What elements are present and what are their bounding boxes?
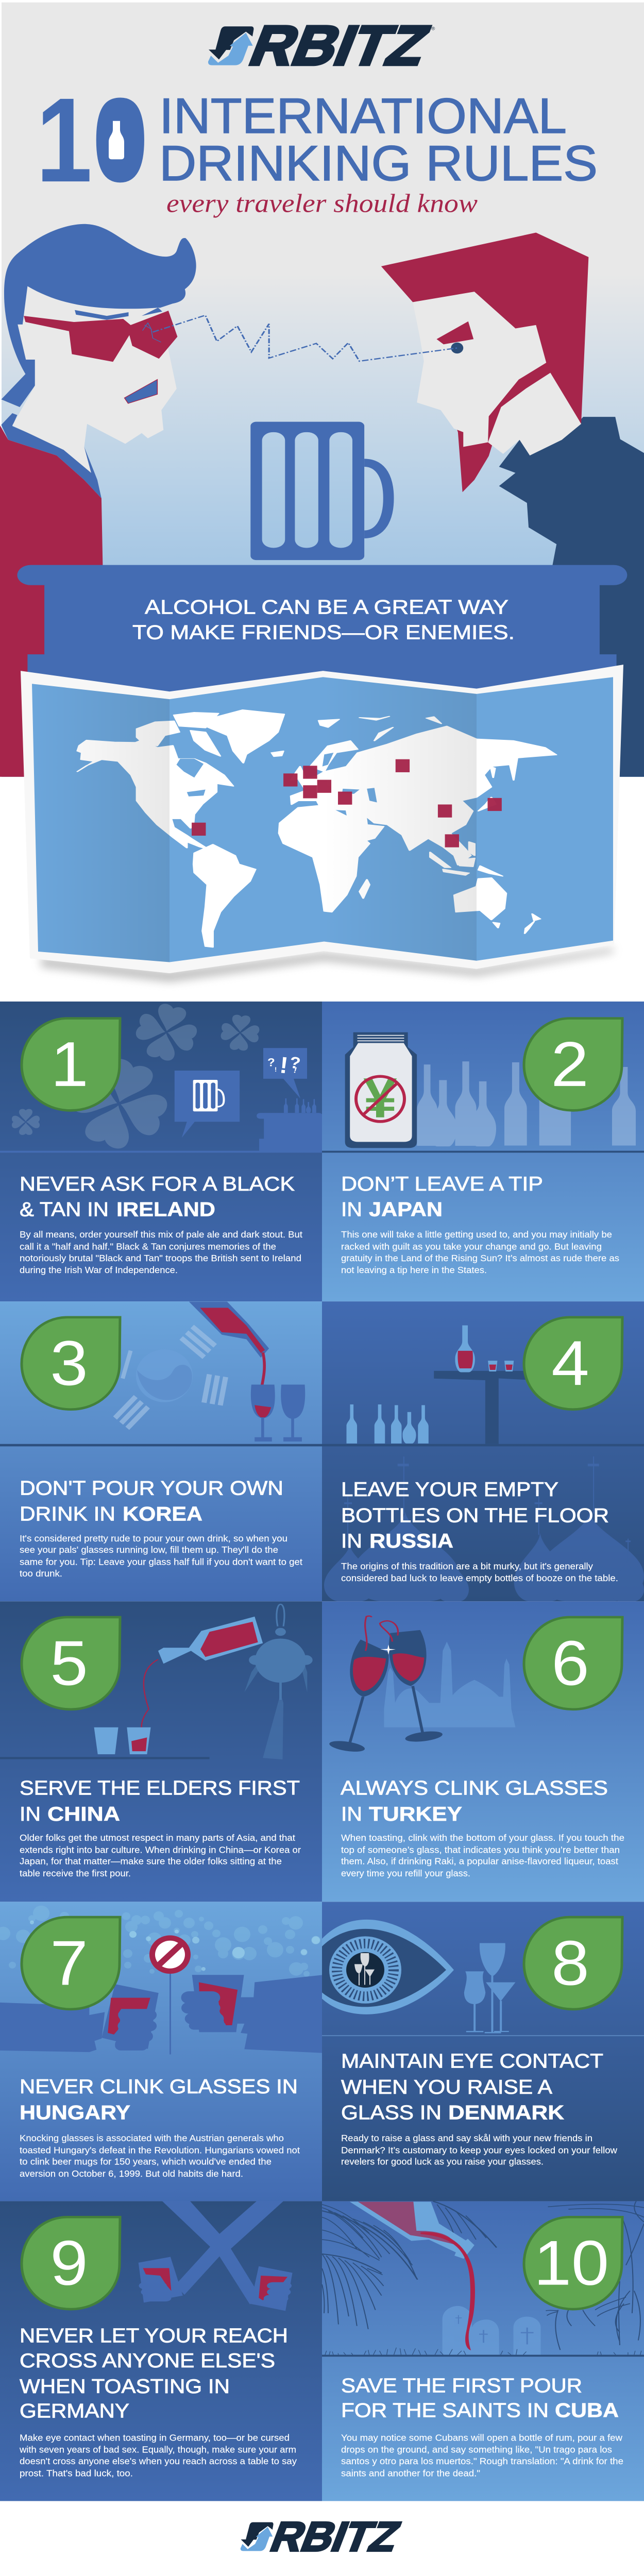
fold shading left <box>32 684 170 962</box>
subtitle: every traveler should know <box>166 190 478 218</box>
heading: SAVE THE FIRST POUR <box>341 2374 582 2397</box>
left man mouth <box>125 380 157 403</box>
panel background <box>0 1601 322 1902</box>
number badge 3: 3 <box>50 1328 88 1399</box>
left arm and glass <box>0 1984 159 2052</box>
speech bubble with confused marks: ? <box>289 1053 302 1072</box>
heading <box>341 2049 603 2124</box>
map sea <box>32 677 613 962</box>
heading: FOR THE SAINTS IN <box>341 2399 549 2421</box>
logo wordmark: RBITZ <box>265 2513 406 2560</box>
Orbitz logo <box>208 14 438 77</box>
heading: DON’T LEAVE A TIP <box>341 1172 543 1195</box>
logo icon: O arrows <box>241 2522 274 2551</box>
heading: GERMANY <box>20 2399 129 2422</box>
heading: GLASS IN <box>341 2101 442 2124</box>
right glass and fist <box>250 2266 293 2311</box>
panel background <box>0 1002 322 1301</box>
panel 1: Ireland <box>0 998 323 1301</box>
floor line <box>0 1151 322 1153</box>
heading <box>20 2324 288 2422</box>
background bottles <box>417 1061 636 1146</box>
number badge 5: 5 <box>50 1628 88 1699</box>
panel 2: Japan <box>322 1002 644 1301</box>
speech bubble with mug <box>175 1071 240 1138</box>
heading: CROSS ANYONE ELSE'S <box>20 2349 275 2371</box>
panel 9: Germany <box>0 2201 322 2501</box>
footer Orbitz logo <box>241 2513 406 2560</box>
number badge 10: 10 <box>534 2228 609 2299</box>
heading <box>20 1776 300 1825</box>
heading: KOREA <box>123 1502 202 1525</box>
shot glasses <box>0 1727 210 1759</box>
Chinese knot <box>244 1604 313 1759</box>
number badge 1 <box>22 1019 120 1110</box>
number badge 3 <box>22 1317 120 1410</box>
heading: HUNGARY <box>20 2101 130 2124</box>
heading: NEVER CLINK GLASSES IN <box>20 2075 298 2098</box>
shelf line <box>322 1151 644 1153</box>
heading: DRINK IN <box>20 1502 115 1525</box>
right man eye <box>451 343 463 353</box>
body text: not leaving a tip here in the States. <box>341 1265 487 1275</box>
heading: BOTTLES ON THE FLOOR <box>341 1504 609 1527</box>
tombstones <box>443 2306 541 2355</box>
body text: toasted Hungary's defeat in the Revolution. Hungarians vowed not <box>20 2145 300 2155</box>
speech bubble with confused marks: ! <box>275 1066 277 1073</box>
divider line <box>322 2035 644 2036</box>
heading: NEVER LET YOUR REACH <box>20 2324 288 2347</box>
body text: call it a "half and half." Black & Tan conjures memories of the <box>20 1241 276 1251</box>
grass and ground <box>322 2348 644 2357</box>
body text: By all means, order yourself this mix of pale ale and dark stout. But <box>20 1229 302 1240</box>
table with bottle and shots <box>434 1325 528 1444</box>
body text: drops on the ground, and say something like, "Un trago para los <box>341 2444 612 2454</box>
floor bottles <box>346 1404 429 1444</box>
map shadow <box>41 948 613 982</box>
number badge 5 <box>22 1617 120 1709</box>
crossed arms <box>162 2201 283 2304</box>
body text: Japan, for that matter—make sure the older folks sitting at the <box>20 1856 282 1867</box>
body text: considered bad luck to leave empty bottles of booze on the table. <box>341 1573 618 1583</box>
body text: Older folks get the utmost respect in many parts of Asia, and that <box>20 1833 295 1843</box>
body text: extends right into bar culture. When drinking in China—or Korea or <box>20 1844 301 1855</box>
number badge 2: 2 <box>551 1029 589 1100</box>
panel 10: Cuba <box>322 2201 644 2501</box>
body text <box>20 1533 302 1579</box>
heading: IRELAND <box>116 1198 215 1221</box>
body text: table receive the first pour. <box>20 1868 131 1878</box>
heading: IN <box>341 1802 362 1825</box>
right man hair <box>381 232 588 492</box>
body text: gratuity in the Land of the Rising Sun? It’s almost as rude there as <box>341 1252 619 1263</box>
map paper frame <box>21 665 623 973</box>
body text: Make eye contact when toasting in Germany, too—or be cursed <box>20 2432 290 2443</box>
mosque silhouette <box>323 1641 515 1727</box>
heading: IN <box>341 1198 362 1221</box>
body text: revelers for good luck as you raise your glasses. <box>341 2156 544 2167</box>
title <box>36 73 598 218</box>
bar headline: ALCOHOL CAN BE A GREAT WAY <box>145 596 509 618</box>
location markers <box>192 759 502 848</box>
logo wordmark: RBITZ <box>242 14 438 77</box>
panel background <box>322 1301 644 1601</box>
number badge 4 <box>524 1317 622 1410</box>
left man shoulder <box>0 426 107 777</box>
jar <box>345 1032 417 1148</box>
heading <box>341 2374 619 2421</box>
heading: DON'T POUR YOUR OWN <box>20 1477 283 1499</box>
palm fronds <box>322 2201 644 2350</box>
speech bubble with confused marks: ? <box>267 1056 275 1069</box>
heading: TURKEY <box>369 1802 462 1825</box>
registered mark: ® <box>431 26 435 32</box>
left man collar <box>1 413 101 498</box>
bar counter <box>17 565 627 716</box>
body text: them. Also, if drinking Raki, a popular anise-flavored liqueur, toast <box>341 1856 618 1867</box>
number badge 2 <box>524 1019 622 1110</box>
speech bubble with confused marks: ! <box>293 1065 298 1075</box>
body text: santos y otro para los muertos." Rough translation: "A drink for the <box>341 2456 623 2466</box>
body text <box>341 1561 618 1583</box>
right man face <box>413 292 546 447</box>
body text <box>20 2133 300 2179</box>
right man neck <box>488 373 581 455</box>
body text: racked with guilt as you take your change and go. But leaving <box>341 1241 602 1251</box>
body text: every time you refill your glass. <box>341 1868 470 1878</box>
panel background <box>322 1902 644 2201</box>
heading: JAPAN <box>369 1198 443 1221</box>
heading: RUSSIA <box>369 1529 453 1552</box>
body text: This one will take a little getting used to, and you may initially be <box>341 1229 612 1240</box>
left man hair <box>1 224 196 407</box>
body text: same for you. Tip: Leave your glass half full if you don't want to get <box>20 1556 302 1567</box>
speech bubble with confused marks <box>263 1048 307 1098</box>
left man face <box>12 286 177 473</box>
body text <box>341 1229 619 1275</box>
Korean flag motif <box>113 1325 228 1430</box>
body text: aversion on October 6, 1999. But old habits die hard. <box>20 2168 243 2179</box>
body text: Denmark? It’s customary to keep your eyes locked on your fellow <box>341 2145 618 2155</box>
hero background <box>2 3 644 777</box>
heading: IN <box>20 1802 41 1825</box>
beer mug <box>250 422 388 560</box>
number badge 4: 4 <box>551 1328 589 1399</box>
floor line <box>0 1444 322 1446</box>
onion domes <box>324 1456 644 1601</box>
bar silhouette <box>257 1098 323 1151</box>
panel background <box>322 1601 644 1902</box>
body text: notoriously brutal "Black and Tan" troops the British sent to Ireland <box>20 1252 301 1263</box>
right man brow <box>436 321 473 344</box>
panel background <box>0 2201 322 2501</box>
body text: The origins of this tradition are a bit murky, but it's generally <box>341 1561 594 1571</box>
number badge 9: 9 <box>50 2228 88 2299</box>
heading: WHEN TOASTING IN <box>20 2375 230 2398</box>
no-yen sign: ¥ <box>363 1066 397 1130</box>
panel 8: Denmark <box>322 1902 644 2201</box>
dashed gaze line <box>153 315 457 361</box>
body text: to clink beer mugs for 150 years, which would've ended the <box>20 2156 272 2167</box>
title line 1: INTERNATIONAL <box>159 88 567 144</box>
panel 4: Russia <box>322 1301 644 1601</box>
right arm and glass <box>181 1975 322 2053</box>
heading <box>20 1477 283 1525</box>
heading: MAINTAIN EYE CONTACT <box>341 2049 603 2072</box>
right man shirt <box>499 417 644 777</box>
body text: Ready to raise a glass and say skål with your new friends in <box>341 2133 592 2143</box>
body text <box>20 1833 301 1878</box>
panel background <box>0 1902 322 2201</box>
body text: When toasting, clink with the bottom of your glass. If you touch the <box>341 1833 624 1843</box>
tiny glasses in pupil <box>354 1953 375 1985</box>
no-yen sign <box>356 1066 404 1130</box>
body text: during the Irish War of Independence. <box>20 1265 178 1275</box>
heading: CHINA <box>47 1802 120 1825</box>
body text: doesn't cross anyone else's when you reach across a table to say <box>20 2456 297 2466</box>
number badge 6: 6 <box>551 1628 589 1699</box>
body text <box>341 2432 623 2478</box>
bubbles <box>0 1906 320 1977</box>
number badge 10 <box>524 2217 622 2309</box>
bar headline <box>132 596 515 643</box>
wine glasses <box>251 1384 305 1442</box>
body text <box>20 1229 302 1275</box>
no-clinking sign <box>149 1936 191 1974</box>
inland seas <box>177 753 377 802</box>
illustration: two men staring <box>0 224 644 777</box>
body text: too drunk. <box>20 1568 62 1579</box>
reflection in sunglasses <box>143 323 161 342</box>
number badge 6 <box>524 1617 622 1709</box>
panel 3: Korea <box>0 1301 322 1601</box>
sign pole <box>170 1974 171 2055</box>
number badge 8 <box>524 1917 622 2009</box>
panel 6: Turkey <box>322 1601 644 1902</box>
bright bubbles <box>30 1921 320 1971</box>
heading: IN <box>341 1529 362 1552</box>
heading: CUBA <box>555 2399 619 2421</box>
title line 2: DRINKING RULES <box>159 135 598 191</box>
body text <box>19 2432 297 2478</box>
heading: ALWAYS CLINK GLASSES <box>341 1776 608 1799</box>
body text: saints and another for the dead." <box>341 2468 480 2478</box>
panel 5: China <box>0 1601 322 1902</box>
clinking wine glasses <box>328 1616 444 1754</box>
continents <box>77 710 556 947</box>
number badge 1: 1 <box>50 1029 89 1100</box>
title number 10 with bottle: 10 <box>36 73 148 207</box>
number badge 8: 8 <box>551 1928 589 1998</box>
bar headline: TO MAKE FRIENDS—OR ENEMIES. <box>132 621 515 643</box>
pouring bottle <box>350 2201 475 2350</box>
heading <box>20 2075 298 2124</box>
heading: DENMARK <box>448 2101 564 2124</box>
panel background <box>0 1301 322 1601</box>
number badge 7 <box>22 1917 120 2009</box>
heading: NEVER ASK FOR A BLACK <box>20 1172 295 1195</box>
speech bubble with confused marks: ! <box>278 1052 290 1078</box>
number badge 9 <box>22 2217 120 2309</box>
panel 7: Hungary <box>0 1902 322 2201</box>
heading <box>341 1478 609 1552</box>
heading: SERVE THE ELDERS FIRST <box>20 1776 300 1799</box>
body text <box>341 2133 618 2167</box>
heading <box>20 1172 295 1221</box>
left man sunglasses <box>24 311 177 362</box>
glassware <box>464 1943 515 2033</box>
left man eyebrows <box>75 308 162 320</box>
body text: You may notice some Cubans will open a bottle of rum, pour a few <box>341 2432 623 2443</box>
body text <box>341 1833 624 1878</box>
panel background <box>322 1002 644 1301</box>
fold shading middle <box>323 677 477 961</box>
heading: & TAN IN <box>20 1198 109 1221</box>
body text: It's considered pretty rude to pour your own drink, so when you <box>20 1533 287 1544</box>
pouring bottle <box>189 1301 269 1406</box>
heading: LEAVE YOUR EMPTY <box>341 1478 558 1501</box>
logo icon: O arrows <box>208 26 253 65</box>
body text: prost. That's bad luck, too. <box>20 2468 133 2478</box>
world map <box>21 665 623 973</box>
body text: see your pals' glasses running low, fill them up. They'll do the <box>20 1545 278 1555</box>
heading <box>341 1172 543 1221</box>
heading <box>341 1776 608 1825</box>
heading: WHEN YOU RAISE A <box>341 2075 552 2098</box>
panel background <box>322 2201 644 2501</box>
body text: Knocking glasses is associated with the Austrian generals who <box>20 2133 284 2143</box>
body text: with seven years of bad sex. Equally, though, make sure your arm <box>19 2444 296 2454</box>
number badge 7: 7 <box>50 1928 88 1998</box>
tilted bottle <box>142 1617 263 1741</box>
eye <box>322 1920 454 2014</box>
sparkle <box>380 1645 396 1655</box>
left glass and fist <box>139 2257 183 2302</box>
shamrocks <box>12 998 261 1159</box>
body text: top of someone’s glass, that indicates you think you’re better than <box>341 1844 620 1855</box>
floor line <box>322 1444 644 1446</box>
